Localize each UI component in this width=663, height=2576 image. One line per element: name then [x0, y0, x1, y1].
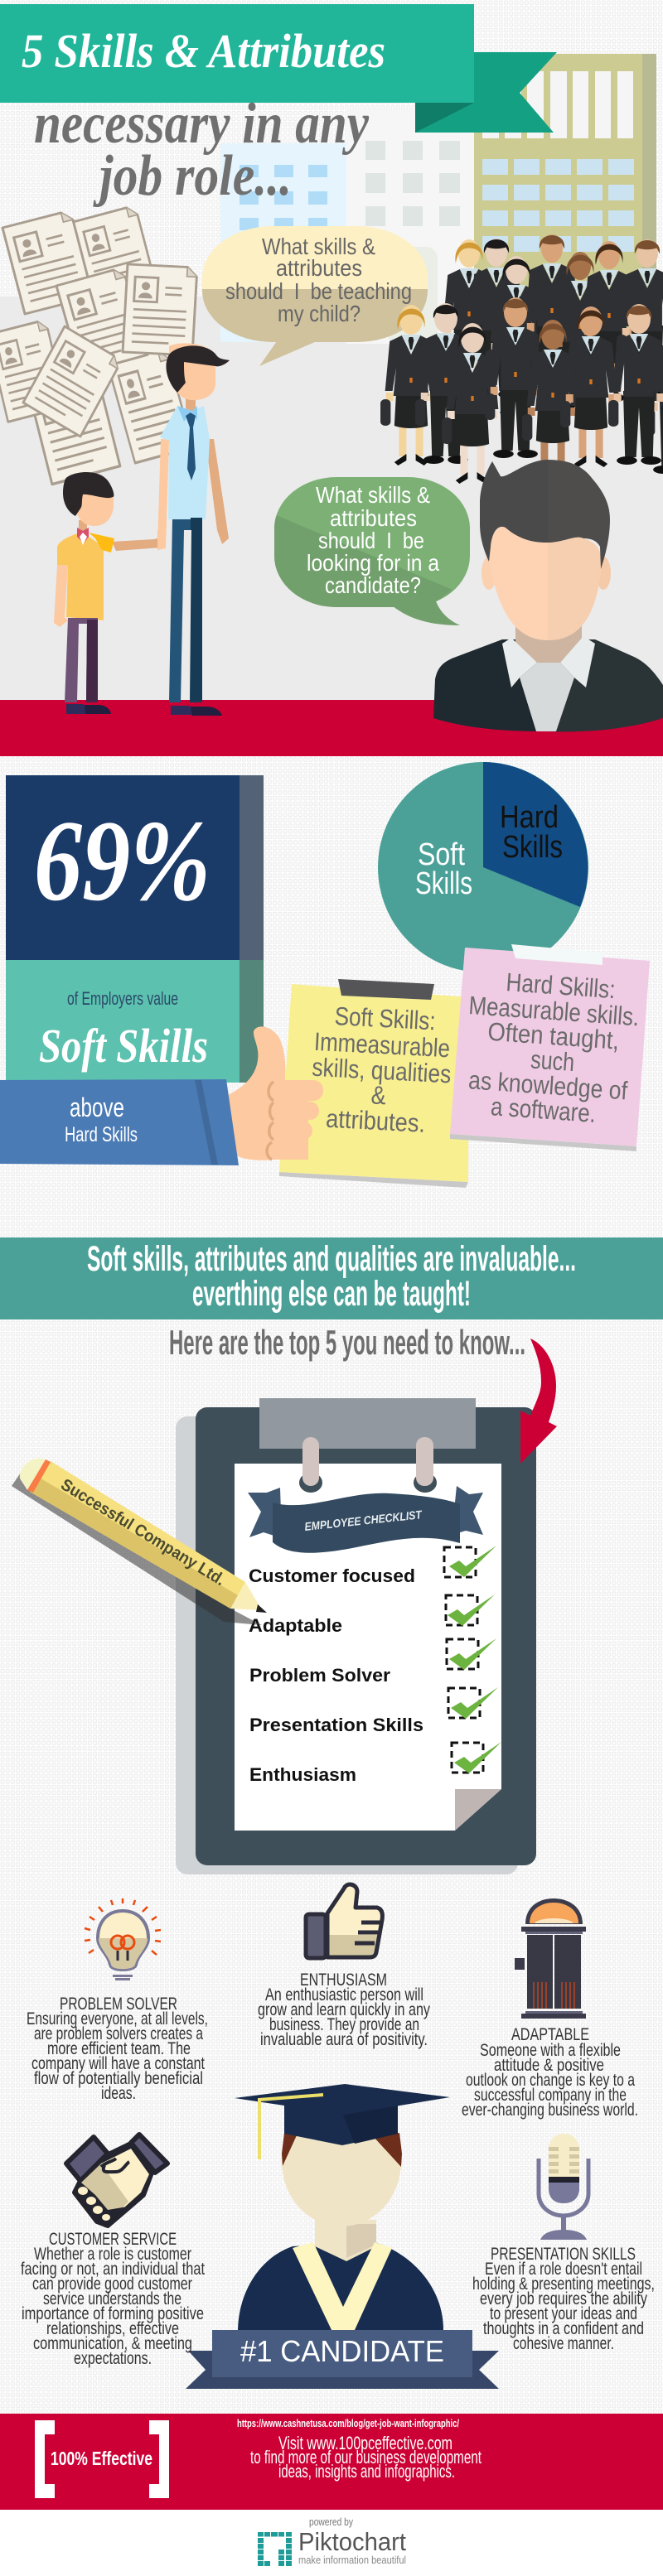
text: parent question [225, 234, 412, 326]
text: of employers value: of Employers value [67, 988, 178, 1009]
text: hard skills definition: Often taught, [486, 1017, 620, 1055]
ribbon: #1 candidate [186, 2330, 499, 2389]
sleeve [0, 1079, 239, 1165]
block: problem solver [27, 1898, 208, 2103]
text: customer service: importance of forming positive [22, 2304, 204, 2323]
text: powered by: powered by [309, 2516, 353, 2528]
text: hard skills definition: as knowledge of [467, 1065, 628, 1106]
text: adaptable [462, 2025, 638, 2120]
text: soft skills definition: Immeasurable [313, 1027, 451, 1063]
text: problem solver: PROBLEM SOLVER [60, 1995, 177, 2014]
block: customer service [21, 2135, 205, 2368]
graduation cap [284, 2104, 398, 2145]
text: customer service: service understands the [43, 2289, 181, 2308]
character: father [157, 343, 230, 716]
checklist items [249, 1565, 423, 1785]
text: hard skills definition: such [530, 1044, 575, 1077]
pie chart: soft vs hard skills: Soft [418, 837, 465, 872]
text: adaptable: ADAPTABLE [511, 2025, 589, 2044]
heading: 5 Skills & Attributes: 5 Skills & Attributes [22, 24, 385, 78]
subtitle: necessary in any [34, 92, 370, 156]
pie chart: soft vs hard skills [378, 762, 588, 972]
text: source url: https://www.cashnetusa.com/blog/get-job-want-infographic/ [237, 2417, 459, 2429]
ribbon: #1 candidate: #1 CANDIDATE [240, 2334, 444, 2368]
text: hard skills definition: a software. [490, 1092, 597, 1128]
text: successful company: Successful Company Ltd. [57, 1475, 228, 1589]
ribbon: employee checklist: EMPLOYEE CHECKLIST [304, 1507, 423, 1533]
text: employer question: attributes [330, 505, 417, 531]
heading: soft skills: Soft Skills [39, 1019, 208, 1073]
text: presentation skills: cohesive manner. [513, 2334, 614, 2353]
block: enthusiasm [258, 1884, 430, 2049]
text: problem solver [27, 1995, 208, 2103]
red ground strip [0, 700, 663, 756]
icon: handshake [66, 2135, 167, 2226]
text: customer service: CUSTOMER SERVICE [49, 2230, 177, 2249]
icon: elevator [515, 1898, 586, 2019]
big number: 69% [34, 797, 211, 925]
text: customer service: relationships, effective [46, 2319, 179, 2338]
text: problem solver: Ensuring everyone, at all levels, [27, 2009, 208, 2028]
block: presentation skills [472, 2134, 655, 2353]
text: enthusiasm: grow and learn quickly in any [258, 2000, 430, 2019]
clip rings [299, 1437, 437, 1493]
pie chart: soft vs hard skills: Hard [500, 800, 559, 835]
text: hard skills definition: Hard Skills: [506, 967, 617, 1004]
text: enthusiasm [258, 1971, 430, 2049]
building: olive tower [474, 54, 656, 344]
icon: light bulb [85, 1898, 161, 1980]
subtitle [34, 92, 370, 208]
text: parent question: should I be teaching [225, 278, 412, 304]
text: customer service: facing or not, an individual that [21, 2260, 205, 2279]
logo: 100% effective brackets [35, 2420, 169, 2498]
text: problem solver: are problem solvers creates a [34, 2024, 203, 2043]
footer white background [0, 2510, 663, 2576]
piktochart attribution [258, 2516, 406, 2566]
text: enthusiasm: An enthusiastic person will [265, 1985, 423, 2004]
text: problem solver: ideas. [101, 2084, 136, 2103]
text: soft skills definition: attributes. [325, 1104, 426, 1138]
building: white [346, 109, 474, 346]
text: customer service: Whether a role is customer [34, 2245, 191, 2264]
banner: soft skills are invaluable [0, 1237, 663, 1319]
text: problem solver: flow of potentially beneficial [34, 2069, 203, 2088]
checklist items: Enthusiasm [249, 1764, 356, 1785]
text: employer question: looking for in a [307, 550, 439, 576]
text: adaptable: attitude & positive [494, 2056, 604, 2075]
text: adaptable: Someone with a flexible [480, 2041, 621, 2060]
text: visit website: Visit www.100pceffective.com [278, 2433, 452, 2453]
text: problem solver: more efficient team. The [47, 2039, 191, 2058]
text: customer service: can provide good customer [32, 2275, 192, 2294]
sticky note: soft skills [279, 979, 469, 1188]
text: parent question: What skills & [262, 234, 375, 259]
text: above: above [70, 1093, 124, 1122]
pie chart: soft vs hard skills: Skills [502, 830, 563, 865]
text: hard skills definition [461, 965, 642, 1131]
logo mark [258, 2532, 292, 2566]
text: soft skills definition: & [370, 1080, 387, 1110]
block: adaptable [462, 1898, 638, 2120]
checklist items: Presentation Skills [249, 1715, 423, 1735]
check boxes [444, 1547, 483, 1773]
text: employer question: should I be [318, 528, 424, 553]
building: blue [220, 143, 346, 342]
speech bubble: parent [202, 226, 428, 366]
text: enthusiasm: business. They provide an [269, 2015, 419, 2034]
ribbon: employee checklist [248, 1486, 483, 1553]
floor [0, 297, 663, 703]
text: visit website [250, 2433, 482, 2482]
tagline: make information beautiful [298, 2554, 406, 2566]
crowd of job candidates [380, 234, 663, 484]
panel: city and candidates scene [0, 54, 663, 756]
text: customer service: communication, & meeting [33, 2334, 192, 2353]
text: visit website: to find more of our business development [250, 2447, 482, 2467]
character: graduate [186, 2084, 499, 2389]
pie chart: soft vs hard skills: Skills [415, 866, 472, 901]
title banner [0, 4, 557, 133]
subtitle: job role... [92, 144, 292, 208]
text: employer question: What skills & [316, 482, 430, 508]
checklist items: Adaptable [249, 1615, 342, 1636]
text: enthusiasm: ENTHUSIASM [300, 1971, 387, 1990]
panel: 69% statistic [6, 775, 264, 1083]
text: enthusiasm: invaluable aura of positivity. [260, 2030, 428, 2049]
sticky note: hard skills [450, 944, 650, 1151]
footer panel [0, 2414, 663, 2510]
speech bubble: employer [274, 477, 470, 630]
text: employer question [307, 482, 439, 598]
text: problem solver: company will have a constant [31, 2054, 205, 2073]
icon: thumbs-up hand with sleeve [0, 1026, 323, 1165]
text: hard skills: Hard Skills [65, 1123, 138, 1146]
body and sash [238, 2242, 443, 2330]
text: customer service [21, 2230, 205, 2368]
checklist items: Problem Solver [249, 1665, 390, 1686]
text: parent question: my child? [278, 301, 361, 326]
checklist items: Customer focused [249, 1565, 415, 1586]
text: employer question: candidate? [325, 572, 421, 598]
text: presentation skills [472, 2245, 655, 2353]
panel: clipboard checklist [176, 1398, 536, 1874]
icon: thumbs up [306, 1884, 383, 1958]
icon: pile of CVs [0, 205, 197, 485]
character: boy [54, 472, 166, 714]
logo: 100% effective brackets: 100% Effective [51, 2448, 152, 2469]
text: soft skills definition: skills, qualities [312, 1053, 452, 1088]
text: parent question: attributes [276, 255, 362, 281]
text: visit website: ideas, insights and infographics. [278, 2461, 455, 2482]
text: soft skills definition [308, 1001, 454, 1139]
text: customer service: expectations. [74, 2349, 152, 2368]
text: soft skills definition: Soft Skills: [334, 1001, 437, 1035]
wordmark: Piktochart [298, 2527, 406, 2556]
character: candidate bust [433, 460, 663, 731]
icon: microphone [539, 2134, 588, 2240]
icon: pencil [12, 1459, 267, 1625]
arrow: pointing to clipboard [520, 1339, 557, 1464]
check marks [448, 1546, 501, 1773]
